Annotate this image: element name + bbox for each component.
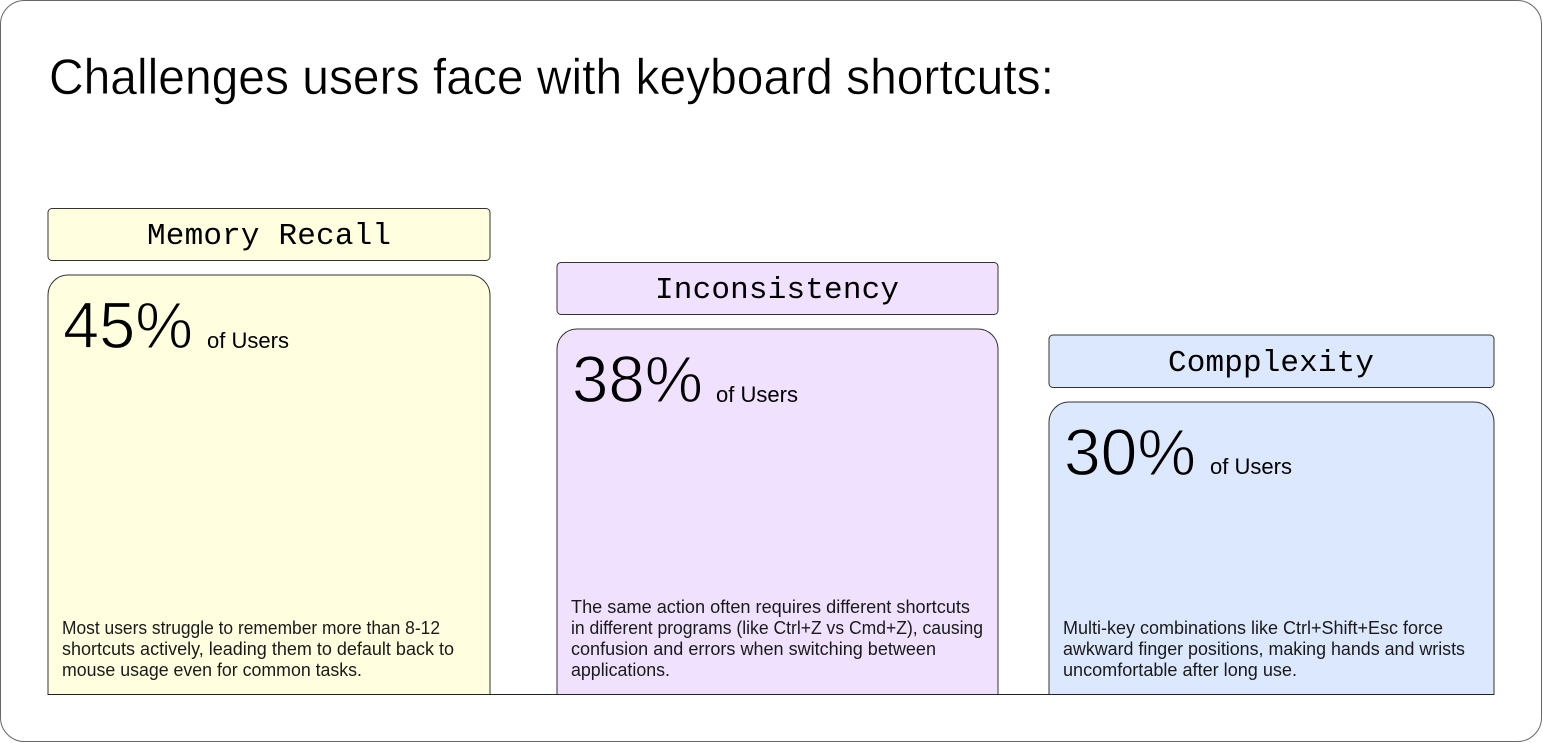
stat: 30% of users: 30%: [1064, 415, 1196, 489]
description: inconsistency: in different programs (like Ctrl+Z vs Cmd+Z), causing: [571, 618, 983, 638]
description: complexity: awkward finger positions, making hands and wrists: [1063, 639, 1465, 659]
card: complexity: [1049, 402, 1494, 694]
stat: 30% of users: of Users: [1210, 454, 1292, 479]
header: complexity: Compplexity: [1168, 346, 1374, 381]
description: complexity: uncomfortable after long use.: [1063, 660, 1297, 680]
header: complexity: [1049, 335, 1494, 388]
description: memory recall: [62, 618, 454, 680]
stat: 45% of users: of Users: [207, 328, 289, 353]
header: memory recall: Memory Recall: [147, 219, 391, 254]
card: inconsistency: [557, 329, 998, 694]
header: inconsistency: [557, 262, 998, 314]
description: inconsistency: applications.: [571, 660, 670, 680]
panel: complexity: [1049, 335, 1494, 694]
stat: 38% of users: of Users: [716, 382, 798, 407]
title: Challenges users face with keyboard shortcuts:: [49, 49, 1054, 105]
description: inconsistency: [571, 597, 983, 680]
description: complexity: [1063, 618, 1465, 680]
header: memory recall: [48, 208, 490, 260]
stat: 45% of users: 45%: [63, 288, 193, 362]
stat: 38% of users: [572, 342, 798, 416]
description: inconsistency: The same action often requires different shortcuts: [571, 597, 970, 617]
stat: 45% of users: [63, 288, 289, 362]
description: complexity: Multi-key combinations like Ctrl+Shift+Esc force: [1063, 618, 1443, 638]
description: memory recall: shortcuts actively, leading them to default back to: [62, 639, 454, 659]
header: inconsistency: Inconsistency: [655, 273, 899, 308]
panel: inconsistency: [557, 262, 998, 694]
description: memory recall: mouse usage even for common tasks.: [62, 660, 362, 680]
panel: memory recall: [48, 208, 490, 694]
card: memory recall: [48, 275, 490, 694]
description: memory recall: Most users struggle to remember more than 8-12: [62, 618, 440, 638]
stat: 30% of users: [1064, 415, 1292, 489]
description: inconsistency: confusion and errors when switching between: [571, 639, 936, 659]
stat: 38% of users: 38%: [572, 342, 703, 416]
